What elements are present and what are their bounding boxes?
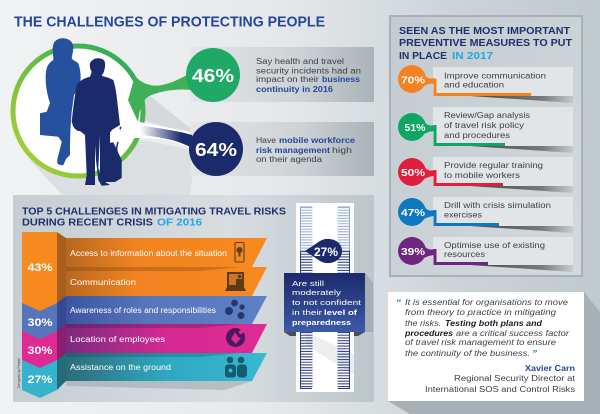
icon: man silhouette — [72, 58, 120, 186]
item: 51%: Review/Gap analysis — [444, 111, 530, 120]
quote text: “ — [396, 298, 401, 309]
bubble: 46% — [186, 48, 240, 102]
strip: awareness — [66, 296, 267, 324]
ribbon: 27% — [22, 350, 66, 398]
bubble: 64% — [189, 122, 243, 176]
quote text: It is essential for organisations to move — [405, 298, 569, 307]
ribbon: 30% magenta — [22, 320, 66, 368]
panel: top 5 challenges — [13, 195, 374, 402]
quote text: Testing both plans and — [445, 319, 543, 328]
item: 39%: Optimise use of existing — [444, 241, 545, 250]
strip: communication — [66, 267, 267, 296]
heading: top 5 challenges: TOP 5 CHALLENGES IN MITIGATING TRAVEL RISKS — [22, 206, 286, 218]
quote attribution: Xavier Carn — [525, 364, 575, 373]
item: 70% — [398, 65, 573, 103]
icon: two people — [225, 357, 247, 378]
quote text — [396, 298, 569, 360]
callout: preparedness: level of — [324, 308, 358, 317]
callout: preparedness: Are still — [292, 279, 324, 288]
text: 46% description — [256, 57, 361, 94]
bubble: 46%: 46% — [192, 66, 234, 86]
ribbon: 30% blue: 30% — [28, 317, 53, 329]
icon: suitcase — [100, 127, 122, 182]
quote text: are a critical success factor — [456, 329, 569, 338]
ribbon: 27%: 27% — [28, 374, 53, 386]
heading: top 5 challenges: DURING RECENT CRISIS — [22, 216, 153, 228]
text: 64% description: high — [332, 146, 352, 155]
text: 46% description: security incidents had an — [256, 66, 361, 76]
bubble: 64%: 64% — [195, 140, 237, 160]
row shadows — [66, 381, 252, 390]
heading: preventive measures: IN 2017 — [452, 50, 493, 62]
title: THE CHALLENGES OF PROTECTING PEOPLE — [14, 14, 325, 30]
item: 47%: Drill with crisis simulation — [444, 201, 551, 210]
quote box — [388, 292, 584, 401]
item: 70%: 70% — [401, 76, 425, 86]
item: 51%: and procedures — [444, 131, 510, 140]
text: 64% description: risk management — [256, 146, 330, 155]
item: 70%: and education — [444, 80, 504, 90]
text: 64% description — [256, 136, 356, 164]
marker: 27%: 27% — [314, 247, 338, 259]
text: 46% description: business — [322, 75, 361, 84]
panel: quote — [388, 292, 600, 414]
item: 50%: to mobile workers — [444, 171, 520, 180]
text: 46% description: Say health and travel — [256, 57, 344, 66]
heading: preventive measures — [399, 25, 573, 62]
quote text: procedures — [404, 329, 454, 338]
ribbon: 43%: 43% — [28, 262, 53, 274]
item: 51%: 51% — [404, 123, 426, 134]
quote shadow — [388, 292, 600, 414]
connector: navy — [140, 125, 192, 148]
item: 51%: of travel risk policy — [444, 121, 524, 130]
panel: protecting people stats — [13, 38, 374, 186]
strip: communication: Communication — [70, 278, 136, 287]
ribbon: 30% blue — [22, 296, 66, 339]
quote text: the continuity of the business. — [405, 349, 530, 358]
text: 64% description: Have — [256, 136, 277, 145]
heading: preventive measures: PREVENTIVE MEASURES TO PUT — [399, 37, 573, 49]
icon: laptop presenter — [225, 272, 246, 291]
heading: preventive measures: IN PLACE — [399, 50, 447, 62]
text: 46% description: continuity in 2016 — [256, 85, 334, 94]
ribbon: 30% magenta: 30% — [28, 345, 53, 357]
item: 39%: 39% — [401, 247, 425, 258]
connector: white gap — [125, 120, 190, 148]
quote attribution — [425, 364, 576, 394]
credit: Designed by People — [17, 358, 21, 388]
icon: woman silhouette — [40, 38, 81, 165]
strip: 64% background — [190, 122, 374, 176]
quote attribution: Regional Security Director at — [454, 374, 576, 383]
panel: preventive measures — [390, 16, 582, 276]
ring around travellers — [13, 46, 143, 176]
item: 47%: exercises — [444, 210, 482, 220]
item: 50%: 50% — [401, 168, 425, 179]
text: 64% description: mobile workforce — [279, 136, 356, 145]
strip: access to information — [66, 238, 267, 267]
icon: globe — [226, 328, 245, 347]
strip: awareness: Awareness of roles and responsibilities — [70, 306, 216, 315]
item: 39%: resources — [444, 250, 485, 259]
heading: top 5 challenges — [22, 206, 286, 228]
marker: 27% — [305, 239, 342, 263]
item: 39% — [398, 237, 573, 272]
icon: paper held by man — [110, 129, 121, 143]
item: 47% — [398, 197, 573, 233]
quote text: of travel risk management to ensure — [405, 338, 557, 347]
quote text: ” — [532, 349, 537, 360]
icon: people network — [225, 299, 245, 319]
item: 47%: 47% — [401, 208, 425, 219]
callout: preparedness: moderately — [292, 288, 341, 297]
strip: location — [66, 324, 267, 353]
ribbon: 43% — [22, 232, 66, 311]
text: 64% description: on their agenda — [256, 155, 323, 164]
strip: location: Location of employees — [70, 335, 165, 344]
quote attribution: International SOS and Control Risks — [425, 385, 575, 394]
panel background — [390, 16, 582, 276]
quote text: the risks. — [405, 319, 441, 328]
item: 70%: Improve communication — [444, 72, 546, 80]
strip: access to information: Access to information about the situation — [70, 249, 227, 258]
heading: top 5 challenges: OF 2016 — [157, 216, 202, 228]
strip: 46% background — [190, 47, 374, 102]
heading: preventive measures: SEEN AS THE MOST IMPORTANT — [399, 25, 571, 37]
connector: green — [128, 72, 192, 122]
callout: preparedness: to not confident — [292, 298, 362, 307]
panel background — [13, 195, 374, 402]
item: 50%: Provide regular training — [444, 161, 543, 170]
icon: phone with info — [235, 242, 244, 262]
callout: preparedness: preparedness — [292, 318, 351, 327]
callout: preparedness: in their — [292, 308, 323, 317]
text: 46% description: impact on their — [256, 75, 319, 84]
item: 51% — [398, 107, 573, 153]
strip: assistance: Assistance on the ground — [70, 363, 171, 372]
item: 50% — [398, 157, 573, 193]
quote text: from theory to practice in mitigating — [405, 308, 557, 317]
gauge: preparedness scale — [296, 203, 354, 392]
strip: assistance — [66, 353, 267, 381]
callout: preparedness — [284, 273, 373, 336]
